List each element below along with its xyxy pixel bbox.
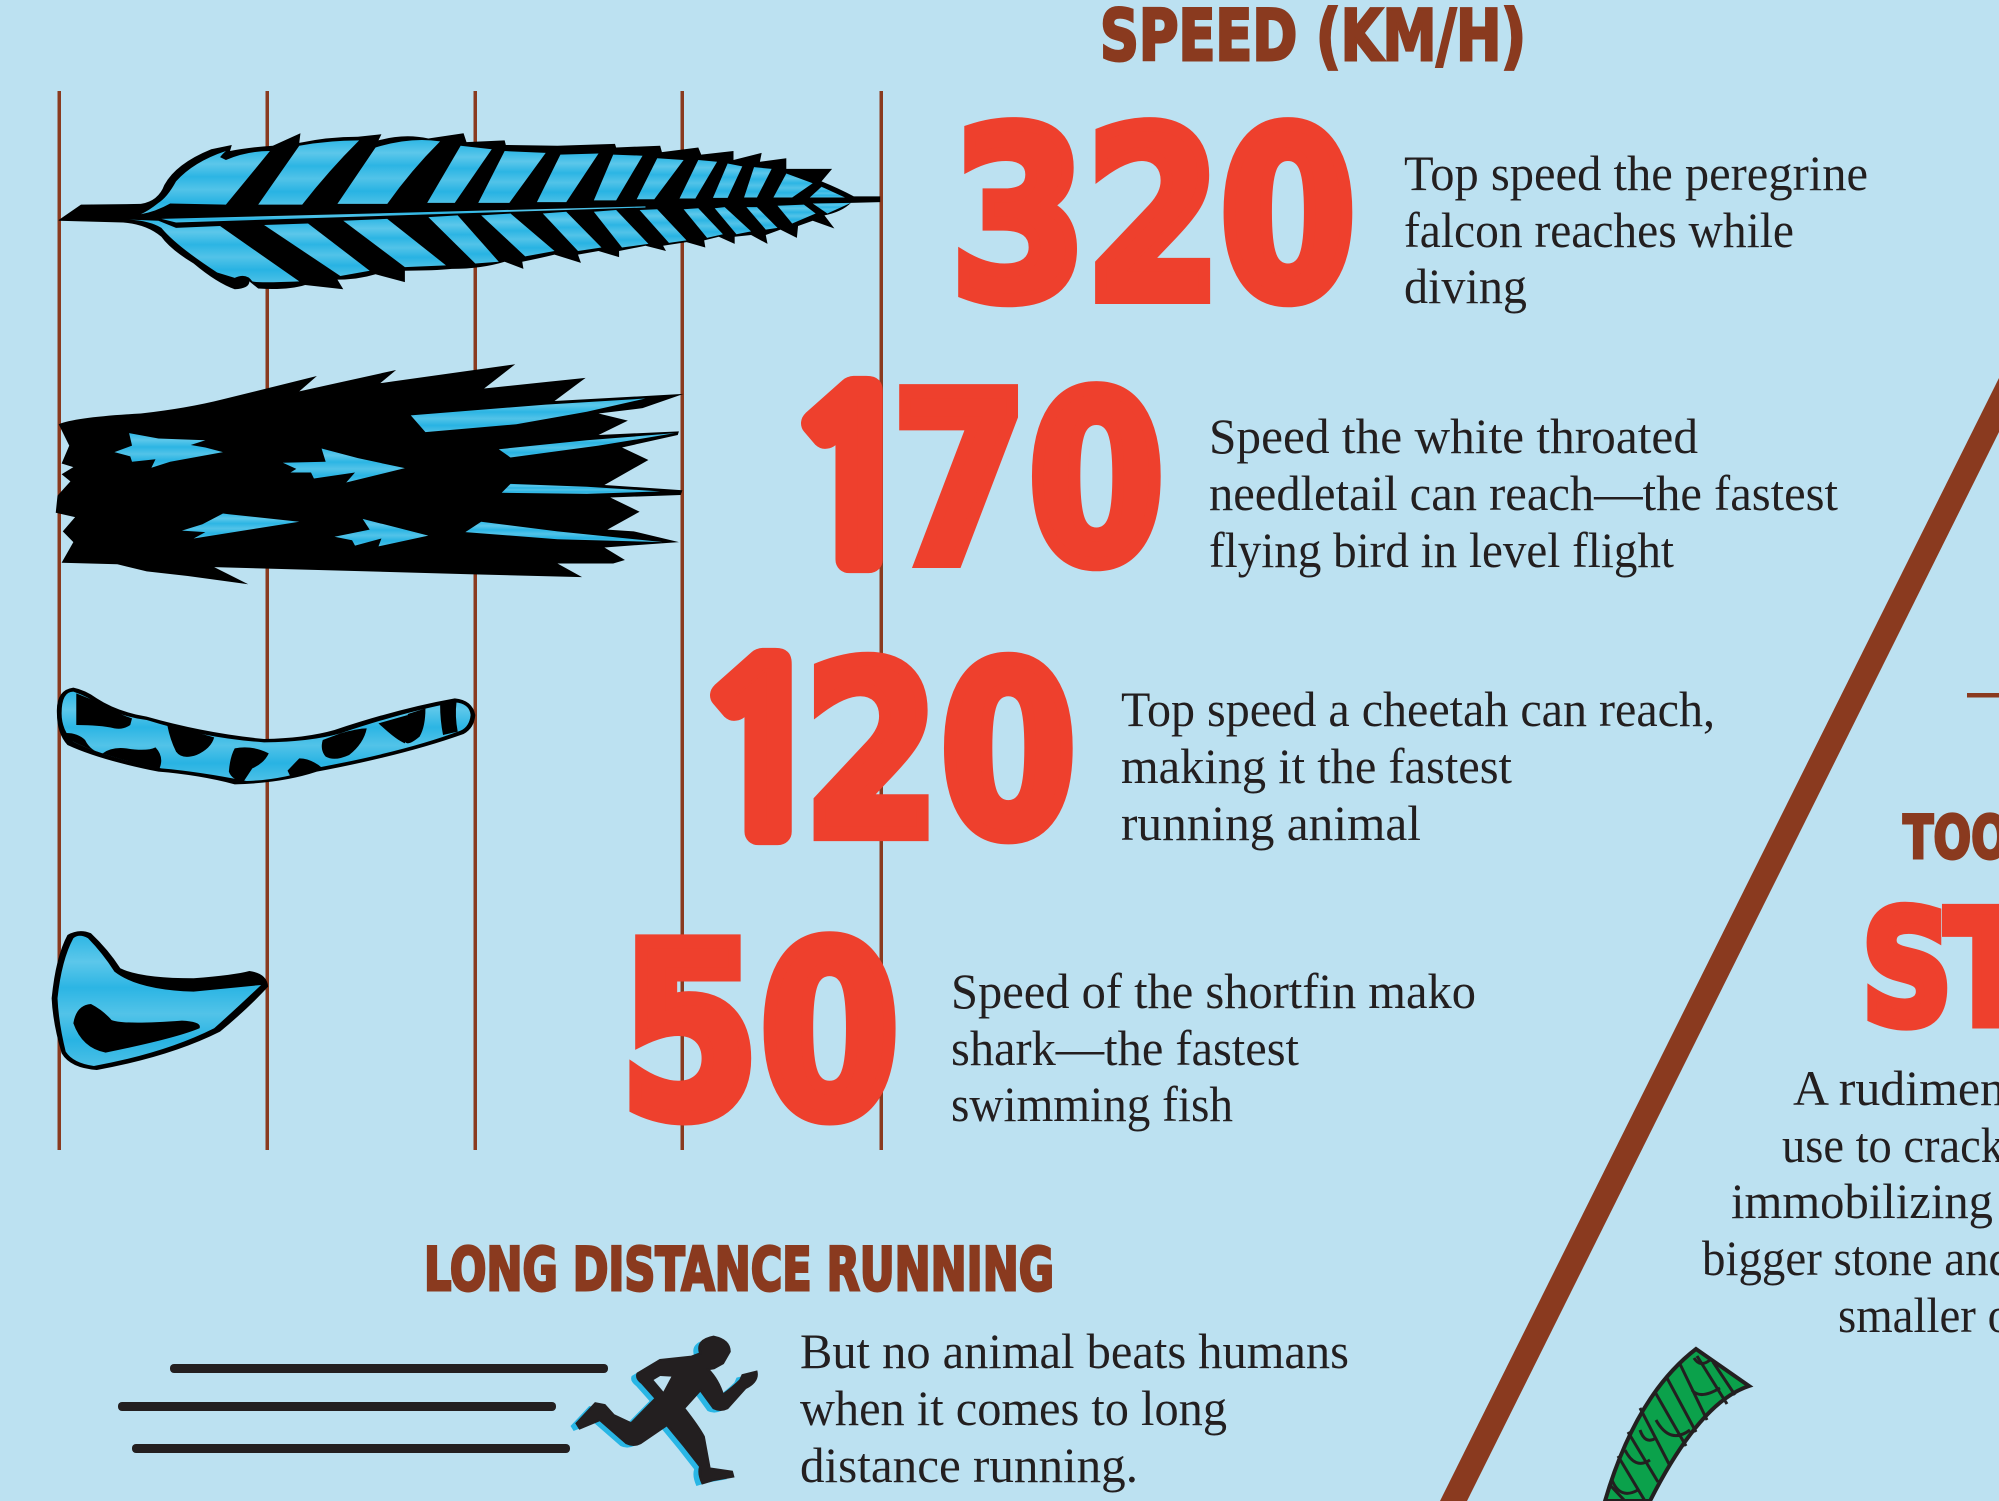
description: shortfin mako shark <box>951 963 1476 1132</box>
description: white throated needletail: Speed the white throated <box>1209 408 1698 464</box>
description: cheetah: making it the fastest <box>1121 738 1512 794</box>
description: peregrine falcon: diving <box>1404 258 1527 314</box>
speed lines <box>118 1364 608 1453</box>
description: white throated needletail <box>1209 408 1838 578</box>
description: cheetah <box>1121 681 1715 851</box>
number: 170: 1 <box>781 367 926 597</box>
description: long distance running: distance running. <box>800 1437 1138 1493</box>
number: 50: 50 <box>620 894 899 1171</box>
divider rule at right edge <box>1967 693 1999 698</box>
description: stone tool (cropped at edge) <box>1702 1060 1999 1343</box>
description: long distance running: But no animal beats humans <box>800 1323 1349 1379</box>
description: long distance running: when it comes to long <box>800 1380 1227 1436</box>
heading: long distance running: LONG DISTANCE RUNNING <box>424 1235 1054 1305</box>
number: 120: 1 <box>690 639 835 869</box>
description: shortfin mako shark: swimming fish <box>951 1076 1233 1132</box>
icon: needletail bird wing <box>56 364 684 584</box>
description: peregrine falcon: Top speed the peregrine <box>1404 145 1868 201</box>
description: long distance running <box>800 1323 1349 1493</box>
description: peregrine falcon: falcon reaches while <box>1404 202 1794 258</box>
description: cheetah: running animal <box>1121 795 1421 851</box>
number: 170: 70 <box>892 345 1164 616</box>
description: cheetah: Top speed a cheetah can reach, <box>1121 681 1715 737</box>
icon: runner <box>571 1337 757 1486</box>
description: shortfin mako shark: Speed of the shortfin mako <box>951 963 1476 1019</box>
icon: peregrine falcon feather <box>59 133 880 289</box>
number: 120: 20 <box>804 616 1076 891</box>
icon: green scaled limb <box>1605 1349 1749 1501</box>
number: 320: 320 <box>951 81 1356 352</box>
icon: shark fin <box>52 931 268 1070</box>
description: white throated needletail: needletail can reach—the fastest <box>1209 465 1838 521</box>
description: peregrine falcon <box>1404 145 1868 314</box>
description: stone tool (cropped at edge): immobilizing <box>1731 1173 1993 1229</box>
description: white throated needletail: flying bird in level flight <box>1209 522 1674 578</box>
icon: cheetah tail <box>57 688 475 784</box>
diagonal divider <box>1440 378 1999 1501</box>
description: shortfin mako shark: shark—the fastest <box>951 1020 1299 1076</box>
